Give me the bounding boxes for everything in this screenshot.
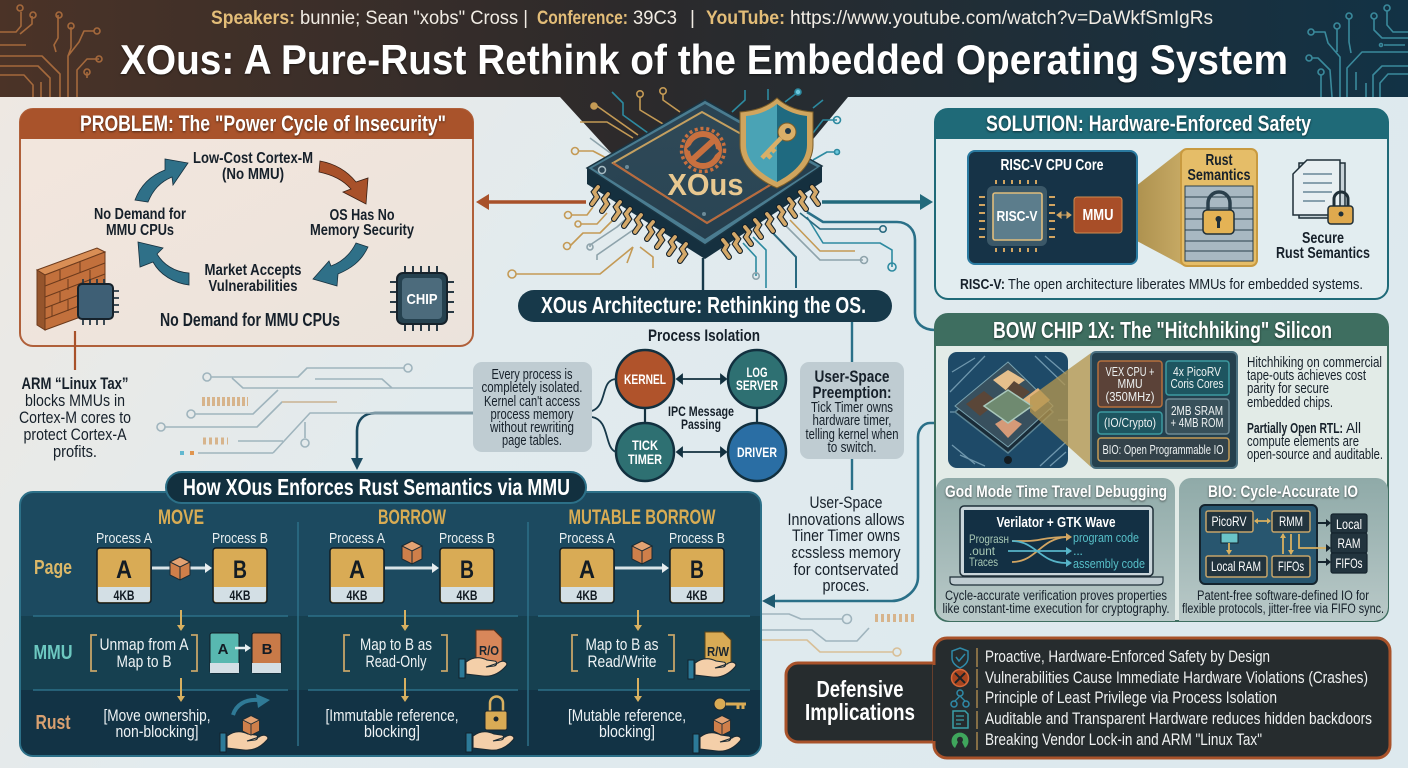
subpanel: BIO [1179, 478, 1388, 621]
text: user-space innovations: proces. [822, 577, 870, 595]
arrow: timer driver [677, 448, 726, 456]
rust step: move ownership: [Move ownership, [104, 706, 210, 725]
page A [97, 548, 151, 603]
node: kernel [616, 350, 674, 408]
icon: gear logo [682, 128, 724, 172]
cycle labels: OS Has No [330, 207, 395, 224]
cycle labels: (No MMU) [222, 166, 284, 183]
icon: laptop: Traces [969, 555, 998, 569]
text: hitchhiking: tape-outs achieves cost [1247, 368, 1366, 384]
page A [330, 548, 384, 603]
icon: shield with key [740, 98, 813, 188]
note: isolation: page tables. [502, 433, 562, 449]
mmu step: read only: Read-Only [366, 652, 427, 671]
text: hitchhiking: Partially Open RTL: [1247, 421, 1343, 437]
rust step: mutable [568, 706, 686, 741]
card: rust semantics [1181, 149, 1257, 266]
block diagram: bow chip: MMU [1118, 376, 1142, 391]
rust step: immutable: [Immutable reference, [326, 706, 458, 725]
header circuit traces right [1306, 5, 1408, 97]
label: IPC: IPC Message [668, 403, 734, 419]
card: rust semantics: Semantics [1188, 167, 1251, 184]
row labels: Rust [36, 712, 71, 734]
note: isolation: Every process is [492, 367, 572, 383]
column: move: MOVE [158, 506, 204, 529]
subpanel: BIO: BIO: Cycle-Accurate IO [1208, 482, 1358, 501]
text: hitchhiking: compute elements are [1247, 434, 1359, 450]
speakers line: 39C3 [633, 8, 677, 29]
column: mutable borrow: Process A [559, 530, 615, 547]
icon: lock on hand [466, 696, 514, 752]
rust step: move ownership [104, 706, 210, 741]
diagram: BIO blocks: Local [1336, 516, 1362, 532]
icon: R/W document on hand [688, 632, 736, 679]
icon: secure document [1293, 160, 1353, 224]
arrow: chip to problem [476, 194, 586, 210]
mmu step: read write: Map to B as [586, 635, 658, 654]
caption: BIO [1182, 588, 1384, 616]
cycle labels: No Demand for [94, 206, 186, 223]
page A: A [349, 556, 365, 584]
row labels [34, 557, 72, 734]
icon: chip: CHIP [406, 291, 438, 308]
arrow: cycle bottom right [313, 243, 368, 286]
caption: RISC-V: RISC-V: [960, 276, 1005, 293]
note: isolation: completely isolated. [482, 380, 582, 396]
cycle labels: Low-Cost Cortex-M [193, 150, 313, 167]
column: move [91, 506, 281, 752]
note: isolation: without rewriting [489, 420, 574, 436]
panel: solution [935, 109, 1388, 299]
page A: A [579, 556, 595, 584]
label: IPC: Passing [681, 416, 721, 432]
arrows down [404, 610, 406, 698]
mmu step: unmap [91, 635, 197, 671]
icon: key and box on hand [693, 698, 746, 753]
mini mapping icon: B [262, 641, 273, 658]
icon: laptop [950, 506, 1163, 585]
node: log server: LOG [746, 364, 768, 380]
diagram: BIO blocks: Local RAM [1211, 558, 1261, 574]
circuit traces around chip [508, 88, 896, 490]
icon: padlock [1203, 192, 1234, 234]
image: silicon die [948, 352, 1068, 468]
text: user-space innovations: for contservated [794, 561, 898, 579]
text: ARM Linux Tax note: protect Cortex-A [24, 425, 127, 444]
note: user-space preemption: to switch. [828, 440, 876, 456]
note: user-space preemption [800, 362, 904, 459]
block diagram: bow chip: (350MHz) [1106, 389, 1154, 404]
block diagram: bow chip: 2MB SRAM [1171, 403, 1223, 418]
heading: defensive implications: Defensive [816, 676, 904, 702]
RISC-V core box [968, 151, 1137, 264]
column: borrow: BORROW [378, 506, 446, 529]
page B: B [690, 556, 704, 584]
text: user-space innovations: Tiner Timer owns [792, 527, 900, 545]
connector: chip to bow chip [807, 212, 935, 330]
cycle labels [94, 150, 414, 330]
connector: bow chip to rust semantics [762, 423, 935, 608]
mmu step: read only [344, 635, 447, 671]
cycle labels: Memory Security [310, 222, 414, 239]
page A: A [116, 556, 132, 584]
text: ARM Linux Tax note: profits. [53, 442, 97, 461]
diagram: process isolation [616, 326, 786, 481]
note: user-space preemption: Tick Timer owns [811, 400, 893, 416]
block diagram: bow chip: Coris Cores [1170, 376, 1224, 391]
rust step: move ownership: non-blocking] [116, 722, 198, 741]
diagram: BIO blocks: RMM [1279, 513, 1303, 529]
node: tick timer: TIMER [628, 451, 662, 467]
connector: wall to ARM note [74, 331, 76, 370]
arrow: borrow page [385, 541, 439, 573]
icon: R/O document on hand [459, 630, 507, 678]
column: move: Process A [96, 530, 152, 547]
callout: defensive implications [786, 638, 1390, 758]
note: isolation [473, 362, 592, 452]
heading: defensive implications [805, 676, 915, 725]
diagram: BIO blocks: RAM [1338, 535, 1360, 551]
note: user-space preemption: telling kernel when [806, 427, 898, 443]
RISC-V core box: RISC-V CPU Core [1000, 157, 1104, 174]
text: hitchhiking: parity for secure [1247, 381, 1329, 397]
card: rust semantics: Rust [1206, 152, 1233, 169]
mmu step: read only: Map to B as [360, 635, 432, 654]
text: ARM Linux Tax note [19, 374, 131, 461]
text: hitchhiking: embedded chips. [1247, 395, 1333, 411]
diagram: BIO blocks: FIFOs [1336, 555, 1362, 571]
heading: process isolation: Process Isolation [648, 326, 760, 345]
decorative traces left [157, 364, 473, 453]
caption: god mode [942, 588, 1170, 616]
page A: 4KB [114, 587, 134, 603]
page B: 4KB [686, 587, 708, 603]
block diagram: bow chip: VEX CPU + [1106, 364, 1154, 379]
header circuit traces left [0, 5, 102, 97]
page B [213, 548, 267, 603]
zoom cone [1122, 150, 1182, 265]
caption: god mode: Cycle-accurate verification proves properties [945, 588, 1167, 603]
decorative traces bottom right [762, 614, 917, 656]
diagram: BIO blocks [1200, 505, 1367, 584]
subpanel: god mode debugging: God Mode Time Travel Debugging [945, 482, 1167, 501]
heading: XOus architecture [518, 290, 892, 322]
text: hitchhiking: All [1346, 421, 1361, 437]
text: user-space innovations: User-Space [810, 494, 882, 512]
caption: god mode: like constant-time execution for cryptography. [942, 601, 1170, 616]
speakers line: YouTube: [706, 8, 785, 29]
text: user-space innovations [788, 494, 904, 595]
icon: R/O document on hand: R/O [479, 643, 499, 658]
speakers line: https://www.youtube.com/watch?v=DaWkfSmIgRs [790, 8, 1213, 29]
heading pill [166, 472, 586, 503]
node: driver: DRIVER [737, 444, 777, 460]
icon: chip [390, 266, 454, 331]
text: user-space innovations: Innovations allows [788, 511, 904, 529]
note: user-space preemption: Preemption: [812, 383, 892, 402]
icon: brick wall with chip [37, 248, 119, 330]
page B: B [233, 556, 247, 584]
rust step: immutable [326, 706, 458, 741]
panel: bow chip [935, 314, 1388, 621]
diagram: BIO blocks: PicoRV [1212, 513, 1247, 529]
speakers line: | [690, 8, 695, 29]
page B: B [460, 556, 474, 584]
pins [592, 187, 818, 261]
arrow: cycle bottom left [138, 242, 189, 285]
RISC-V core box: RISC-V [996, 208, 1038, 225]
arrow: kernel log [677, 375, 726, 383]
text: ARM Linux Tax note: blocks MMUs in [25, 391, 125, 410]
heading: problem: PROBLEM: The "Power Cycle of Insecurity" [80, 111, 446, 136]
list item 1 [952, 648, 1270, 668]
note: isolation: process memory [490, 407, 574, 423]
caption: BIO: Patent-free software-defined IO for [1197, 588, 1369, 603]
block diagram: bow chip: BIO: Open Programmable IO [1102, 442, 1224, 457]
arrow: mutable page [615, 541, 669, 573]
arrows down [637, 610, 639, 698]
node: driver [728, 423, 786, 481]
icon: laptop: Prograsн [969, 532, 1009, 546]
text: ARM Linux Tax note: Cortex-M cores to [19, 408, 131, 427]
speakers line: Conference: [537, 8, 628, 29]
page A: 4KB [346, 587, 368, 603]
column: move: Process B [212, 530, 268, 547]
mmu step: read write: Read/Write [588, 652, 656, 671]
subpanel: god mode debugging [936, 478, 1175, 621]
cycle labels: Market Accepts [204, 262, 302, 279]
note: isolation: Kernel can't access [484, 394, 580, 410]
block diagram: bow chip: + 4MB ROM [1170, 415, 1224, 430]
note: user-space preemption: hardware timer, [812, 413, 892, 429]
list item 5: Breaking Vendor Lock-in and ARM "Linux Tax" [985, 731, 1262, 749]
title: XOus: A Pure-Rust Rethink of the Embedded Operating System [120, 36, 1288, 83]
arrow: move page [152, 557, 212, 580]
list item 3: Principle of Least Privilege via Process Isolation [985, 689, 1277, 707]
label: secure rust semantics: Rust Semantics [1276, 245, 1370, 262]
page B [670, 548, 724, 603]
icon: laptop: ... [1073, 543, 1083, 558]
connector: isolation to rust semantics [351, 413, 473, 470]
block diagram: bow chip: 4x PicoRV [1173, 364, 1221, 379]
heading: defensive implications: Implications [805, 699, 915, 725]
mini mapping icon [210, 633, 281, 673]
page A [560, 548, 614, 603]
text: hitchhiking [1247, 355, 1383, 463]
panel: how XOus enforces rust semantics [20, 472, 761, 756]
icon: R/W document on hand: R/W [707, 644, 730, 659]
arrows down [180, 610, 182, 698]
connectors: note to nodes [592, 379, 616, 452]
text: ARM Linux Tax note: ARM “Linux Tax” [22, 374, 128, 393]
column: borrow: Process B [439, 530, 495, 547]
heading pill: How XOus Enforces Rust Semantics via MMU [183, 474, 570, 500]
icon: laptop: assembly code [1073, 556, 1145, 571]
column: borrow [326, 506, 514, 752]
list item 1: Proactive, Hardware-Enforced Safety by Design [985, 648, 1270, 666]
page A: 4KB [576, 587, 598, 603]
rust step: mutable: blocking] [599, 722, 655, 741]
panel: problem [20, 109, 473, 346]
block diagram: bow chip [1091, 352, 1237, 468]
mmu step: read write [572, 635, 674, 671]
label: secure rust semantics: Secure [1302, 230, 1344, 247]
arrow: cycle top right [319, 161, 368, 204]
column: mutable borrow [559, 506, 746, 753]
column: mutable borrow: MUTABLE BORROW [568, 506, 716, 529]
cycle labels: MMU CPUs [106, 222, 174, 239]
node: tick timer [616, 423, 674, 481]
rust step: immutable: blocking] [364, 722, 420, 741]
XOus central chip [587, 98, 822, 261]
note: user-space preemption: User-Space [814, 367, 890, 386]
icon: laptop: Verilator + GTK Wave [996, 514, 1116, 531]
mini mapping icon: A [218, 641, 229, 658]
heading: solution: SOLUTION: Hardware-Enforced Safety [986, 111, 1312, 136]
column: mutable borrow: Process B [669, 530, 725, 547]
speakers line: Speakers: [211, 8, 295, 29]
node: tick timer: TICK [632, 437, 658, 453]
node: log server: SERVER [736, 377, 778, 393]
speakers line [211, 8, 1213, 29]
chip wordmark: XOus [668, 167, 744, 202]
column: borrow: Process A [329, 530, 385, 547]
icon: laptop: program code [1073, 530, 1139, 545]
arrow: chip to solution [822, 194, 933, 210]
row labels: MMU [34, 642, 72, 664]
heading: XOus architecture: XOus Architecture: Rethinking the OS. [541, 292, 866, 318]
icon: laptop: .ount [969, 544, 996, 558]
page B: 4KB [456, 587, 478, 603]
node: kernel: KERNEL [624, 371, 666, 387]
RISC-V core box: MMU [1082, 207, 1114, 224]
mmu step: unmap: Unmap from A [100, 635, 189, 654]
rust step: mutable: [Mutable reference, [568, 706, 686, 725]
speakers line: bunnie; Sean "xobs" Cross | [300, 8, 528, 29]
label: secure rust semantics [1276, 230, 1370, 262]
page B: 4KB [230, 587, 250, 603]
header band [0, 0, 1408, 155]
node: log server [728, 350, 786, 408]
block diagram: bow chip: (IO/Crypto) [1104, 415, 1156, 430]
cycle labels: No Demand for MMU CPUs [160, 310, 340, 330]
icon: hand with box and arrow [220, 694, 270, 752]
arrow: cycle top left [135, 159, 188, 202]
zoom cone [1030, 353, 1091, 467]
page B [440, 548, 494, 603]
label: IPC [668, 403, 734, 432]
text: user-space innovations: εcssless memory [792, 544, 901, 562]
mmu step: unmap: Map to B [116, 652, 172, 671]
row labels: Page [34, 557, 72, 579]
diagram: BIO blocks: FIFOs [1278, 558, 1304, 574]
cycle labels: Vulnerabilities [208, 278, 298, 295]
